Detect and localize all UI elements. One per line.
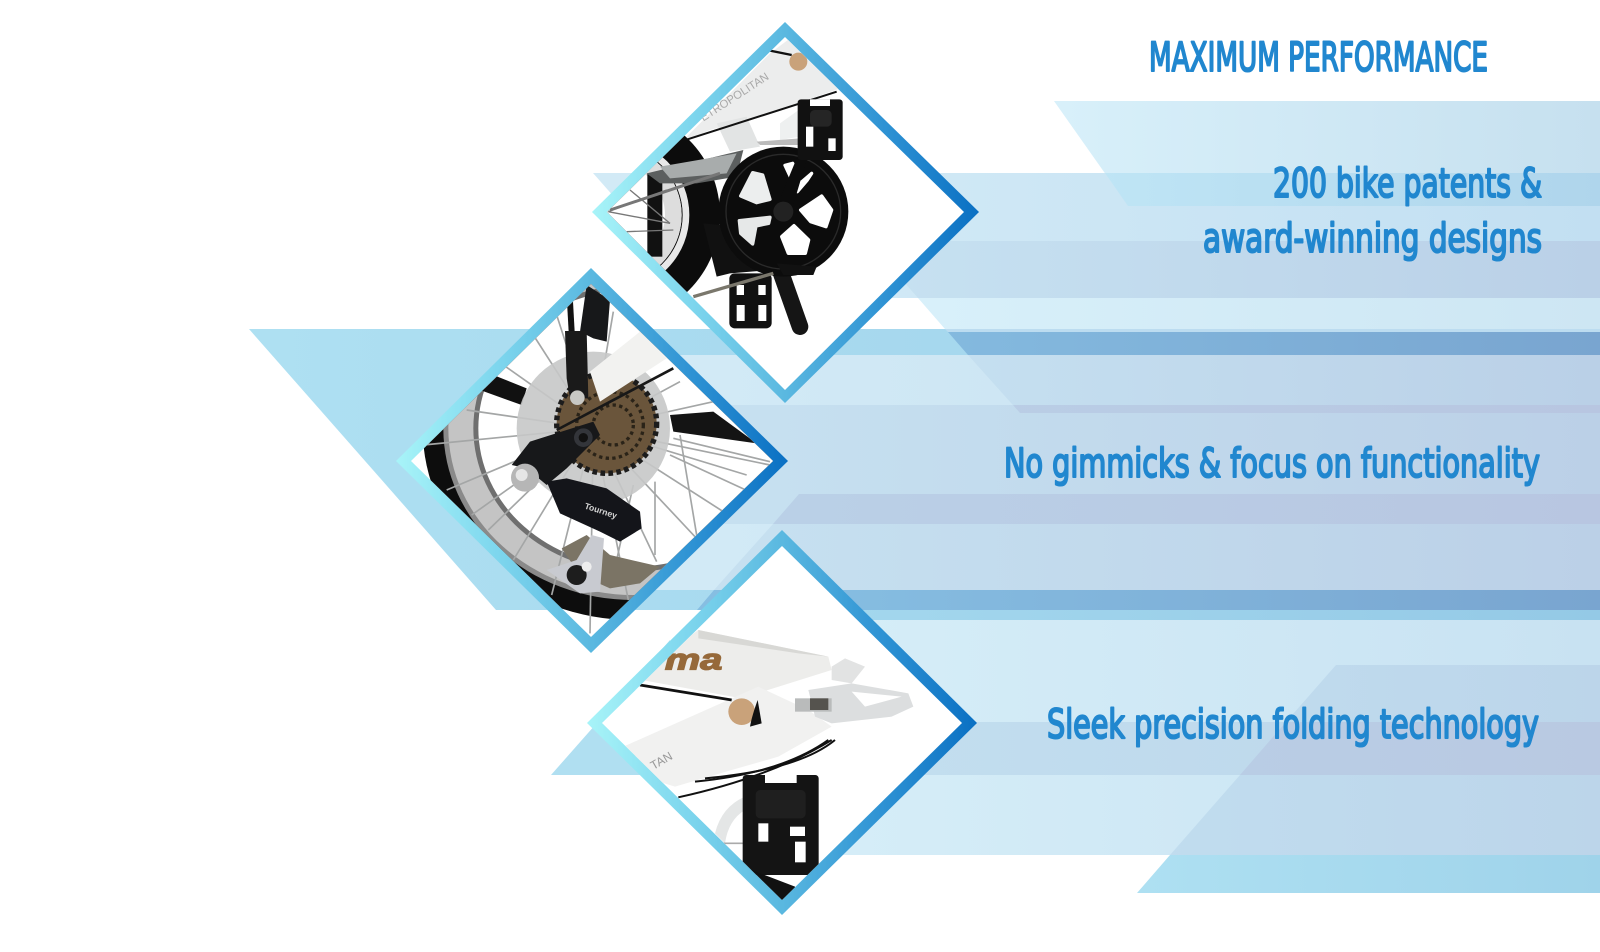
diamond photo: frame folding hinge: ma xyxy=(665,643,722,676)
diamond photo: frame folding hinge: TAN xyxy=(648,749,675,773)
diamond photo: chainwheel and pedals: ETROPOLITAN xyxy=(698,71,771,124)
diamond photo: rear derailleur and cassette: Tourney xyxy=(583,501,619,521)
feature text: patents xyxy=(1203,161,1542,262)
diamond photo: rear derailleur and cassette xyxy=(396,268,788,653)
diamond photo: chainwheel and pedals xyxy=(592,22,979,403)
diamond photo: frame folding hinge xyxy=(587,530,977,915)
background chevron bands xyxy=(249,101,1600,893)
infographic canvas xyxy=(249,22,1600,915)
